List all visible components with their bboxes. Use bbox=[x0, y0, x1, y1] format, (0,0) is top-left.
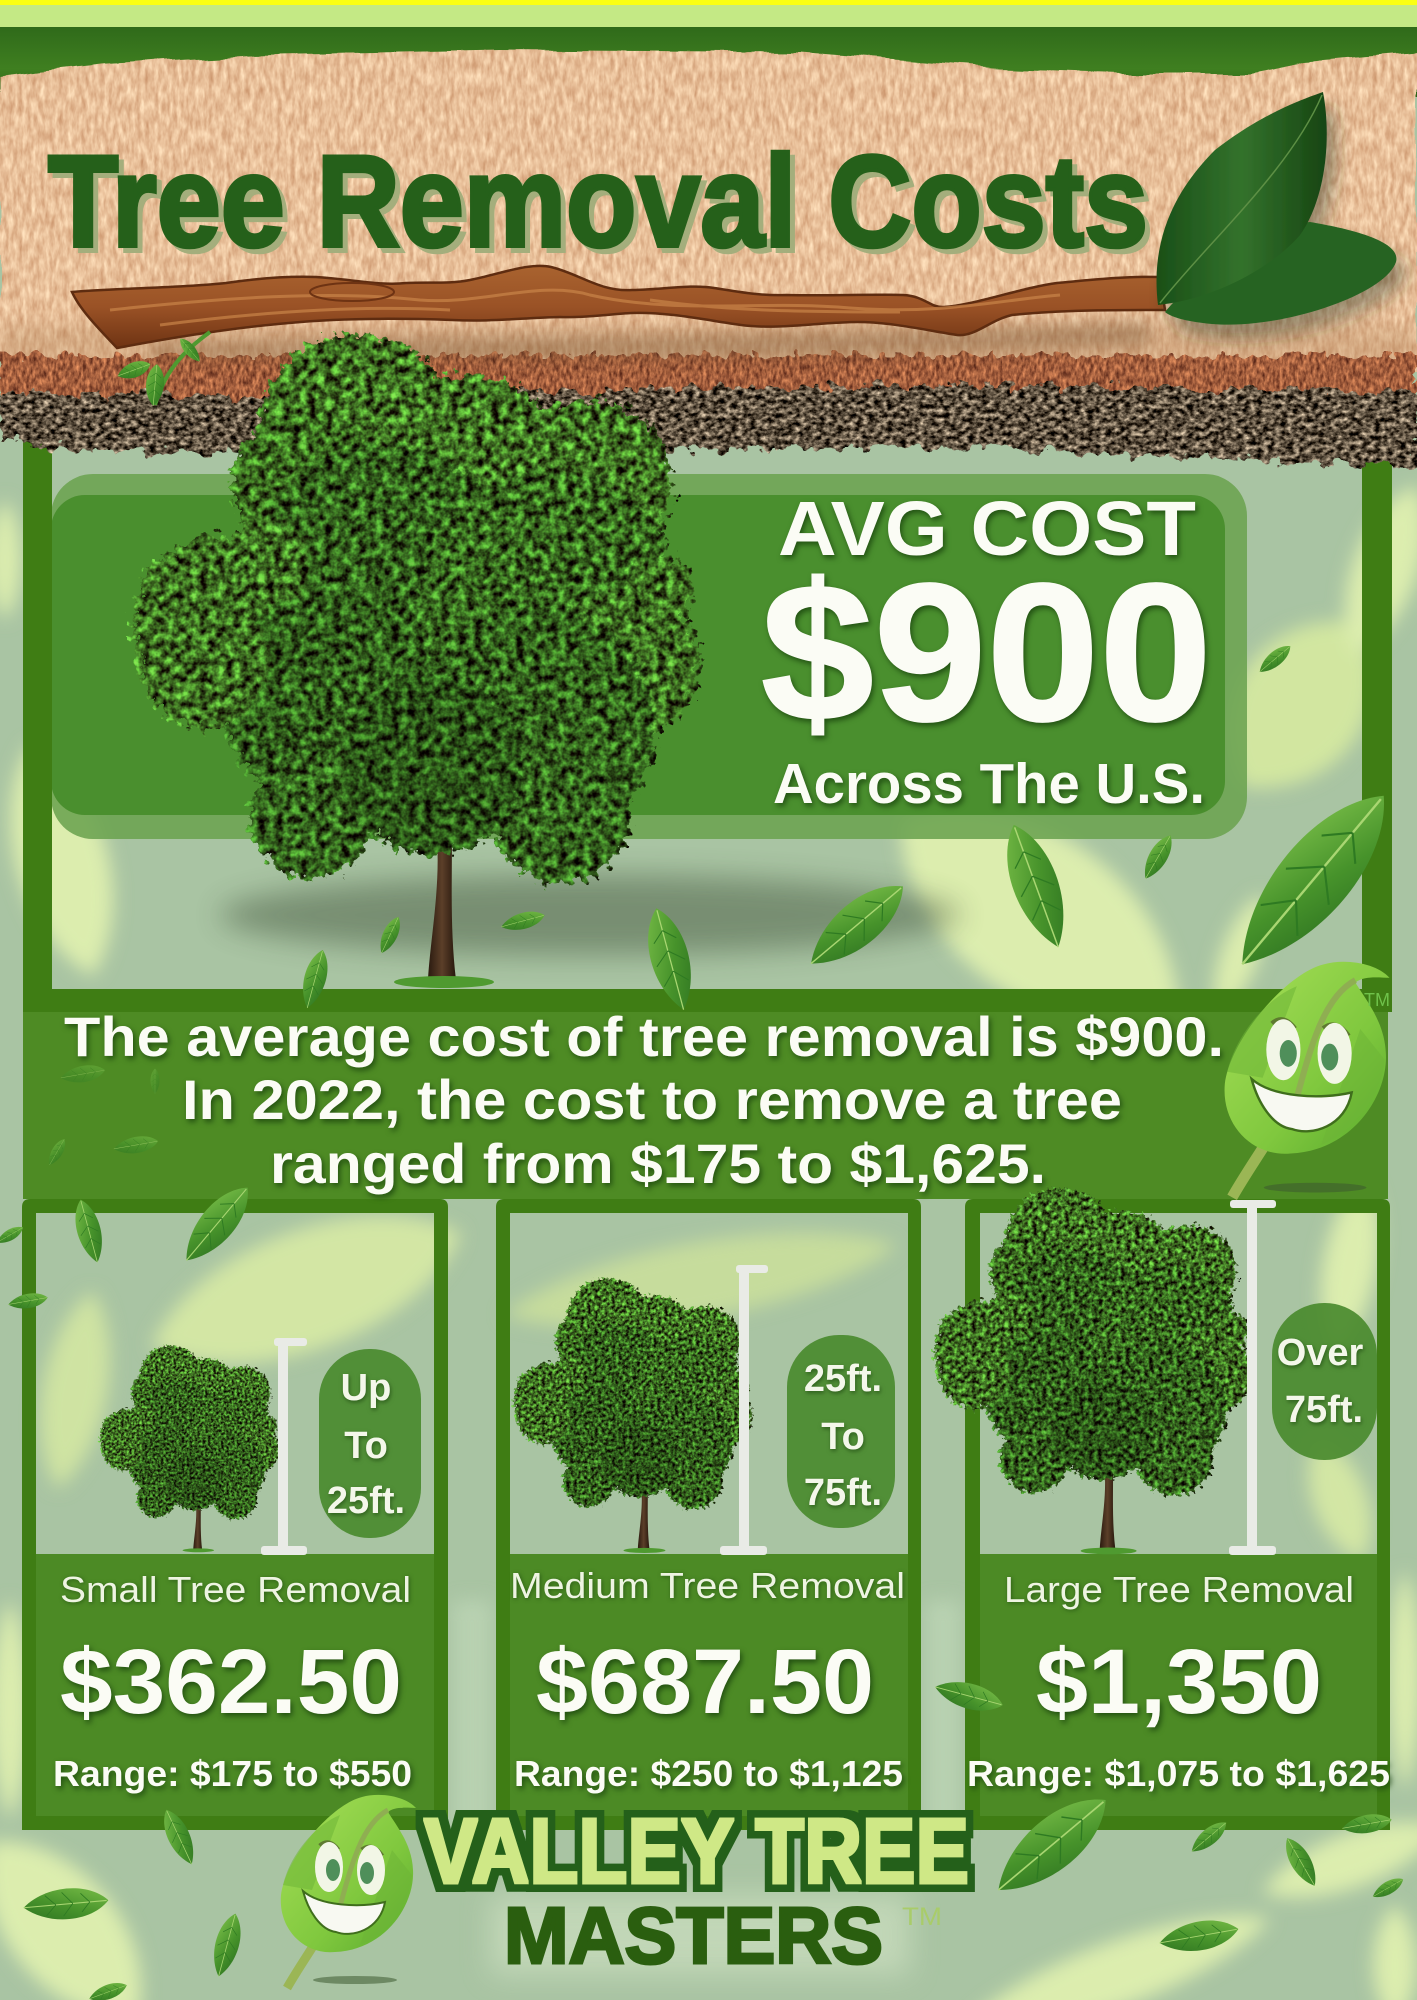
height pill bbox=[787, 1335, 895, 1528]
height pill: To bbox=[821, 1416, 865, 1458]
trademark: TM bbox=[1364, 990, 1390, 1010]
pale background leaves bbox=[0, 474, 1417, 2000]
range: Range: $175 to $550 bbox=[53, 1753, 412, 1794]
average cost text bbox=[761, 486, 1212, 816]
height pill: 25ft. bbox=[804, 1358, 882, 1400]
icon: leaves on branch bbox=[1157, 92, 1396, 325]
wood surface bbox=[0, 50, 1417, 375]
height pill bbox=[1272, 1303, 1377, 1460]
card: large tree content bbox=[934, 1188, 1390, 1794]
price: $1,350 bbox=[1036, 1631, 1322, 1733]
rounded callout inner bbox=[51, 495, 1225, 815]
card: small tree frame bbox=[22, 1199, 448, 1830]
summary text bbox=[64, 1005, 1224, 1195]
label: Medium Tree Removal bbox=[510, 1565, 905, 1606]
card: medium tree content bbox=[510, 1265, 905, 1794]
card: medium tree frame bbox=[496, 1199, 921, 1830]
mascot: logo leaf bbox=[281, 1795, 416, 1988]
summary text: In 2022, the cost to remove a tree bbox=[182, 1068, 1122, 1131]
height pill: 25ft. bbox=[327, 1480, 405, 1522]
label: Small Tree Removal bbox=[60, 1569, 411, 1610]
floating green leaves bbox=[0, 641, 1411, 2000]
height pill: Up bbox=[341, 1367, 391, 1409]
heading: avg cost: AVG COST bbox=[778, 486, 1196, 572]
price: $362.50 bbox=[60, 1631, 402, 1733]
top stripes bbox=[0, 0, 1417, 97]
logo wordmark top: VALLEY TREE bbox=[424, 1799, 969, 1903]
main tree bbox=[133, 334, 700, 988]
logo trademark: TM bbox=[902, 1903, 942, 1931]
rounded callout outer bbox=[51, 474, 1247, 839]
ground shadow bbox=[220, 875, 960, 955]
title: Tree Removal Costs bbox=[48, 128, 1148, 274]
height pill: 75ft. bbox=[1285, 1389, 1363, 1431]
large tree bbox=[934, 1188, 1252, 1554]
logo bbox=[281, 1795, 969, 1988]
range: Range: $250 to $1,125 bbox=[514, 1753, 903, 1794]
gap lightening between cards bbox=[452, 1600, 961, 1840]
big number: $900 bbox=[761, 543, 1212, 762]
icon: sprig bbox=[115, 332, 210, 407]
summary text: ranged from $175 to $1,625. bbox=[270, 1132, 1046, 1195]
height bar bbox=[720, 1265, 768, 1555]
bark strip bbox=[0, 355, 1417, 410]
panel frame bbox=[23, 430, 1392, 1012]
soil and rock edge bbox=[0, 385, 1417, 468]
height pill: 75ft. bbox=[804, 1472, 882, 1514]
wood plank header bbox=[0, 50, 1417, 468]
height bar bbox=[261, 1338, 307, 1555]
height pill: To bbox=[344, 1425, 388, 1467]
small tree bbox=[100, 1346, 279, 1552]
price: $687.50 bbox=[536, 1631, 874, 1733]
branch shadow bbox=[150, 320, 1150, 361]
card: small tree content bbox=[53, 1338, 421, 1794]
panel: average cost bbox=[23, 430, 1392, 1012]
medium tree bbox=[514, 1278, 752, 1553]
mascot: leaf character bbox=[1225, 962, 1390, 1197]
card: large tree frame bbox=[965, 1199, 1390, 1830]
panel: summary band bbox=[23, 1012, 1388, 1199]
summary text: The average cost of tree removal is $900. bbox=[64, 1005, 1224, 1068]
range: Range: $1,075 to $1,625 bbox=[967, 1753, 1390, 1794]
logo glow bbox=[490, 1895, 910, 1975]
height pill bbox=[319, 1349, 421, 1538]
plank lower shading bbox=[0, 325, 1417, 365]
height bar bbox=[1229, 1200, 1276, 1555]
label: Large Tree Removal bbox=[1004, 1569, 1354, 1610]
logo wordmark bottom: MASTERS bbox=[504, 1891, 883, 1980]
subheading: Across The U.S. bbox=[773, 752, 1205, 816]
height pill: Over bbox=[1277, 1332, 1364, 1374]
branch bbox=[72, 266, 1165, 348]
